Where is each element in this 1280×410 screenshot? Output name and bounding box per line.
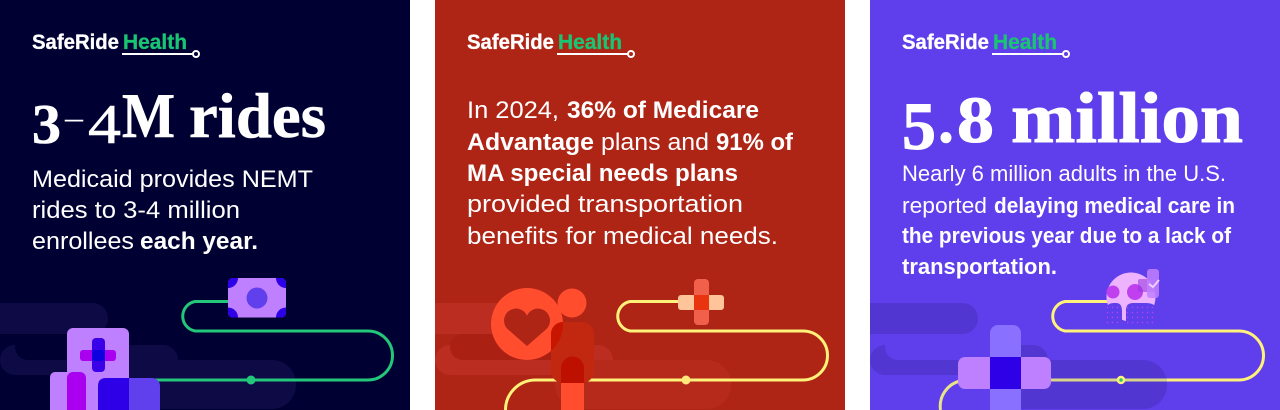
text block: delayed care description (902, 161, 1235, 279)
text block: delayed care description: delaying medical care in (994, 193, 1235, 218)
panel: Medicare Advantage (435, 0, 845, 410)
text block: Medicare statistics (467, 97, 794, 250)
logo: SafeRide (902, 31, 989, 54)
logo (32, 31, 199, 57)
text block: Medicaid description (32, 166, 313, 255)
text block: delayed care description: reported (902, 193, 987, 218)
heading: 3-4M rides: M (122, 80, 175, 151)
heading: 5.8 million: 5 (902, 88, 936, 164)
heading: 3-4M rides: – (64, 97, 84, 137)
text block: Medicaid description: rides to 3-4 million (32, 197, 240, 224)
icon: people circle with checklist (1106, 269, 1159, 324)
heading: 5.8 million: million (1011, 78, 1243, 158)
icon: heart circle (491, 288, 563, 360)
text block: Medicare statistics: Advantage (467, 129, 594, 156)
icon: person (551, 288, 594, 410)
text block: Medicare statistics: MA special needs plans (467, 160, 738, 187)
heading: 5.8 million (902, 78, 1243, 164)
text block: delayed care description: transportation. (902, 254, 1057, 279)
logo: SafeRide (467, 31, 554, 54)
heading: 3-4M rides: 4 (88, 94, 121, 156)
text block: Medicare statistics: 36% of Medicare (567, 97, 759, 124)
text block: Medicare statistics: benefits for medical needs. (467, 223, 778, 250)
icon: bandage cross (678, 279, 724, 325)
logo (467, 31, 634, 57)
logo: SafeRide (32, 31, 119, 54)
text block: delayed care description: the previous year due to a lack of (902, 223, 1231, 248)
icon: medical cross (958, 325, 1051, 410)
heading: 5.8 million: 8 (957, 84, 994, 157)
icon: money bill (228, 278, 286, 318)
logo: Health (558, 31, 622, 54)
route line: yellow (940, 302, 1264, 410)
text block: Medicaid description: each year. (140, 228, 258, 255)
text block: Medicare statistics: provided transportation (467, 191, 743, 218)
text block: Medicaid description: enrollees (32, 228, 134, 255)
text block: Medicare statistics: plans and (601, 129, 709, 156)
text block: delayed care description: Nearly 6 million adults in the U.S. (902, 161, 1226, 186)
heading: 3-4M rides (32, 80, 326, 156)
panel: 5.8 million adults (870, 0, 1280, 410)
background cloud pills (830, 303, 1167, 409)
panel: Medicaid rides (0, 0, 410, 410)
background cloud pills (0, 303, 296, 409)
heading: 3-4M rides: 3 (32, 94, 61, 156)
heading: 3-4M rides: rides (189, 80, 326, 151)
route line: yellow (506, 302, 828, 410)
text block: Medicare statistics: In 2024, (467, 97, 559, 124)
icon: hospital building (50, 328, 160, 410)
heading: 5.8 million: . (938, 84, 954, 157)
background cloud pills (395, 303, 731, 409)
route line: green (150, 302, 392, 384)
logo: Health (123, 31, 187, 54)
text block: Medicaid description: Medicaid provides NEMT (32, 166, 313, 193)
logo (902, 31, 1069, 57)
text block: Medicare statistics: 91% of (716, 129, 794, 156)
logo: Health (993, 31, 1057, 54)
